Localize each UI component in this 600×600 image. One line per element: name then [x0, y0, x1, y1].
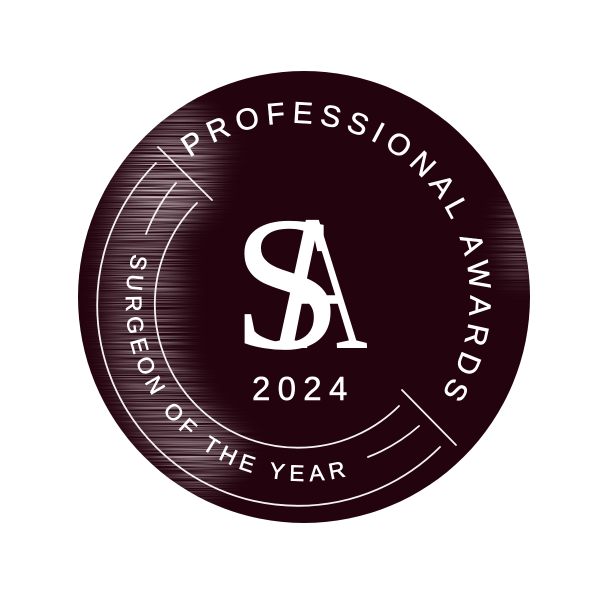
middle arc lower segment: [368, 426, 419, 457]
lower divider line: [402, 390, 456, 445]
award badge: [78, 71, 530, 523]
upper divider line: [158, 147, 212, 200]
brushed metal sheen: [88, 99, 530, 502]
monogram letter S: S: [231, 177, 343, 390]
monogram letter A: A: [258, 175, 371, 390]
decorative arcs and dividers: [97, 147, 456, 506]
year: 2024: [252, 370, 355, 407]
outer arc: [97, 163, 440, 506]
middle arc upper segment: [146, 183, 176, 234]
SA monogram: [231, 175, 371, 390]
dark disc background: [78, 71, 530, 523]
subheading: surgeon of the year: SURGEON OF THE YEAR: [126, 255, 346, 482]
inner arc: [155, 203, 399, 448]
heading: professional awards: PROFESSIONAL AWARDS: [180, 102, 491, 401]
